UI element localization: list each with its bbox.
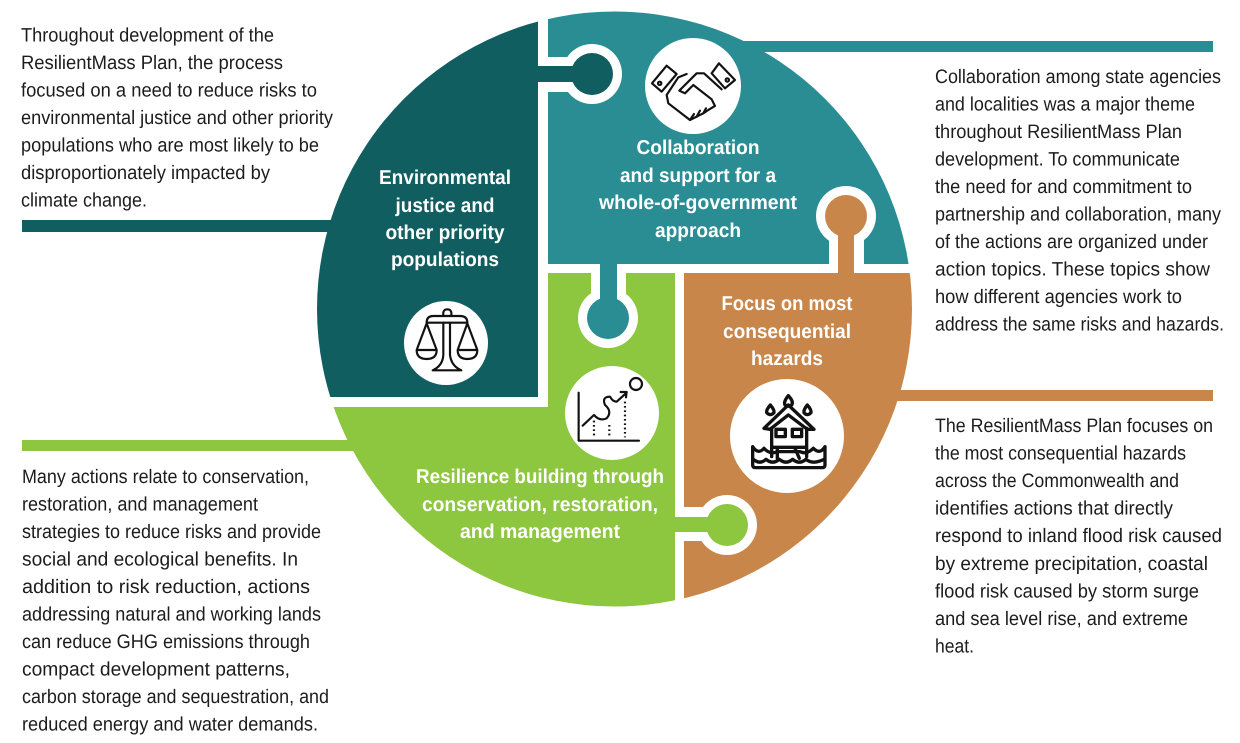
text block: hazards: and sea level rise, and extreme: [935, 608, 1188, 630]
text block: environmental justice: focused on a need to reduce risks to: [21, 80, 317, 102]
heading: hazards: Focus on most: [722, 293, 853, 315]
heading: collaboration: [598, 137, 797, 242]
heading: environmental justice: justice and: [395, 195, 494, 217]
panel: collaboration: [548, 0, 928, 264]
heading: collaboration: and support for a: [620, 165, 777, 187]
heading: hazards: hazards: [751, 348, 823, 370]
text block: collaboration: development. To communicate: [935, 148, 1180, 170]
text block: resilience: carbon storage and sequestration, and: [22, 686, 329, 708]
text block: environmental justice: [21, 24, 333, 212]
text block: environmental justice: disproportionately impacted by: [21, 162, 270, 184]
text block: collaboration: action topics. These topics show: [935, 258, 1211, 280]
icon: growth chart: [565, 366, 659, 460]
text block: hazards: across the Commonwealth and: [935, 470, 1179, 492]
panel: environmental justice: [317, 22, 538, 397]
text block: collaboration: and localities was a major theme: [935, 94, 1195, 116]
connector line: collaboration: [735, 41, 1213, 52]
heading: collaboration: approach: [655, 220, 741, 242]
text block: collaboration: throughout ResilientMass Plan: [935, 121, 1182, 143]
text block: resilience: can reduce GHG emissions through: [22, 631, 310, 653]
text block: resilience: compact development patterns,: [22, 658, 290, 680]
text block: hazards: respond to inland flood risk caused: [935, 525, 1222, 547]
text block: hazards: by extreme precipitation, coastal: [935, 553, 1208, 575]
heading: resilience: and management: [460, 521, 620, 543]
panel: consequential hazards: [684, 273, 924, 613]
puzzle knob: environmental justice: [530, 44, 622, 104]
text block: resilience: restoration, and management: [22, 494, 259, 516]
text block: hazards: flood risk caused by storm surge: [935, 580, 1199, 602]
heading: resilience: conservation, restoration,: [422, 494, 658, 516]
connector line: resilience: [22, 440, 362, 451]
text block: environmental justice: Throughout development of the: [21, 24, 274, 46]
heading: environmental justice: [379, 167, 511, 271]
text block: environmental justice: environmental justice and other priority: [21, 107, 333, 129]
text block: resilience: social and ecological benefits. In: [22, 548, 298, 570]
heading: environmental justice: populations: [391, 249, 499, 271]
text block: environmental justice: ResilientMass Plan, the process: [21, 52, 283, 74]
heading: environmental justice: other priority: [386, 222, 505, 244]
icon: scales of justice: [404, 301, 488, 385]
text block: collaboration: partnership and collaboration, many: [935, 204, 1221, 226]
heading: hazards: consequential: [723, 321, 851, 343]
heading: collaboration: whole-of-government: [598, 192, 797, 214]
text block: collaboration: how different agencies work to: [935, 286, 1182, 308]
text block: hazards: heat.: [935, 636, 974, 658]
text block: hazards: The ResilientMass Plan focuses on: [935, 415, 1213, 437]
text block: resilience: strategies to reduce risks and provide: [22, 521, 321, 543]
panel: resilience building: [334, 273, 675, 606]
connector line: environmental justice: [22, 220, 332, 232]
connector line: hazards: [890, 390, 1213, 401]
puzzle knob: resilience: [670, 495, 757, 555]
text block: resilience: addressing natural and working lands: [22, 604, 321, 626]
icon: flooded house: [730, 379, 844, 493]
text block: resilience: addition to risk reduction, actions: [22, 576, 310, 598]
heading: resilience: Resilience building through: [416, 466, 664, 488]
puzzle knob: collaboration: [578, 258, 638, 348]
text block: hazards: [935, 415, 1222, 658]
text block: resilience: [22, 466, 329, 736]
text block: collaboration: [935, 66, 1224, 336]
text block: collaboration: of the actions are organized under: [935, 231, 1208, 253]
text block: resilience: Many actions relate to conservation,: [22, 466, 309, 488]
text block: environmental justice: climate change.: [21, 190, 147, 212]
heading: resilience: [416, 466, 664, 543]
puzzle knob: hazards: [816, 186, 876, 275]
text block: collaboration: Collaboration among state agencies: [935, 66, 1221, 88]
text block: hazards: identifies actions that directly: [935, 498, 1173, 520]
heading: collaboration: Collaboration: [636, 137, 760, 159]
heading: hazards: [722, 293, 853, 370]
heading: environmental justice: Environmental: [379, 167, 511, 189]
text block: hazards: the most consequential hazards: [935, 442, 1186, 464]
text block: collaboration: the need for and commitment to: [935, 176, 1192, 198]
text block: environmental justice: populations who are most likely to be: [21, 134, 319, 156]
text block: resilience: reduced energy and water demands.: [22, 714, 318, 736]
icon: handshake: [645, 38, 741, 134]
